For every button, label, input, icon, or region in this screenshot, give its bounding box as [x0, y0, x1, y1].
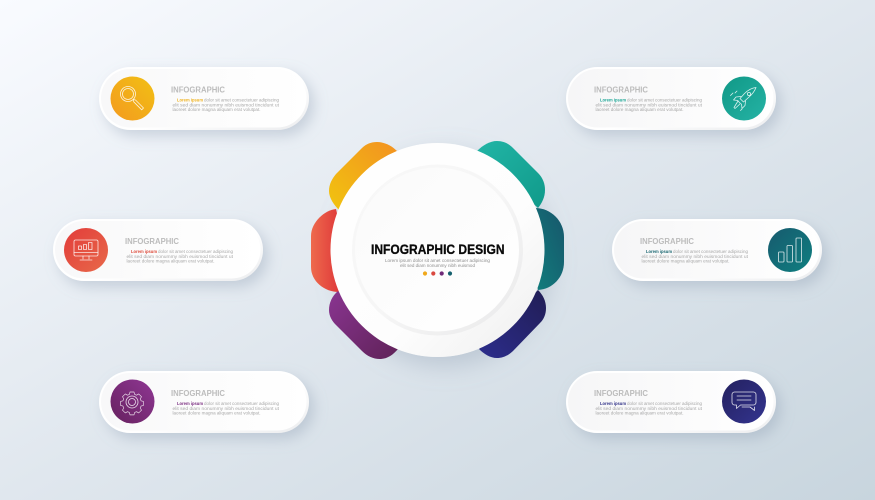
circle shadow: [330, 143, 544, 357]
body text: elit sed diam nonummy nibh euismod tincidunt ut: [642, 254, 749, 259]
body text: [642, 249, 749, 264]
petal: red: [311, 209, 345, 292]
heading: INFOGRAPHIC: [171, 84, 225, 94]
heading: INFOGRAPHIC: [594, 84, 648, 94]
body text: dolor sit amet consectetuer adipiscing: [204, 98, 279, 103]
body text: [172, 98, 280, 112]
center text: Lorem ipsum dolor sit amet consectetuer adipiscing: [385, 258, 490, 264]
outer circle: [330, 143, 544, 357]
petal: yellow: [329, 142, 397, 210]
panel: gear card: [99, 371, 309, 433]
body text: dolor sit amet consectetuer adipiscing: [158, 249, 233, 254]
card body: [99, 371, 309, 433]
body text: Lorem ipsum: [177, 98, 203, 103]
body text: dolor sit amet consectetuer adipiscing: [627, 401, 702, 406]
center text: [385, 258, 490, 269]
panel: search card: [99, 67, 309, 130]
body text: Lorem ipsum: [646, 249, 672, 254]
body text: dolor sit amet consectetuer adipiscing: [673, 249, 748, 254]
icon: magnifier: [110, 76, 154, 120]
body text: [596, 98, 703, 112]
card body: [99, 67, 309, 130]
body text: [126, 249, 234, 264]
panel: rocket card: [566, 67, 776, 130]
icon: bars: [768, 228, 812, 272]
body text: laoreet dolore magna aliquam erat volutpat.: [596, 107, 684, 112]
card body: [566, 67, 776, 130]
center text: elit sed diam nonummy nibh euismod: [400, 263, 475, 269]
body text: dolor sit amet consectetuer adipiscing: [627, 98, 702, 103]
icon: speech bubbles: [722, 380, 766, 424]
icon: rocket: [722, 76, 766, 120]
body text: laoreet dolore magna aliquam erat volutpat.: [126, 259, 214, 264]
center dots: [423, 271, 452, 276]
body text: Lorem ipsum: [600, 401, 626, 406]
card body: [566, 371, 776, 433]
body text: elit sed diam nonummy nibh euismod tincidunt ut: [596, 406, 703, 411]
body text: elit sed diam nonummy nibh euismod tincidunt ut: [596, 102, 703, 107]
body text: [172, 401, 280, 416]
petal: purple: [329, 291, 398, 359]
center title: INFOGRAPHIC DESIGN: [371, 242, 504, 257]
card body: [612, 219, 822, 281]
heading: INFOGRAPHIC: [171, 388, 225, 398]
panel: monitor card: [53, 219, 263, 281]
card body: [53, 219, 263, 281]
heading: INFOGRAPHIC: [640, 236, 694, 246]
petal: teal: [477, 141, 545, 208]
heading: INFOGRAPHIC: [125, 236, 179, 246]
petal: navy: [479, 290, 546, 358]
body text: Lorem ipsum: [177, 401, 203, 406]
body text: laoreet dolore magna aliquam erat volutpat.: [596, 411, 684, 416]
body text: Lorem ipsum: [131, 249, 157, 254]
inner disc: [355, 168, 519, 332]
body text: dolor sit amet consectetuer adipiscing: [204, 401, 279, 406]
body text: laoreet dolore magna aliquam erat volutpat.: [172, 107, 260, 112]
panel: bar chart card: [612, 219, 822, 281]
body text: elit sed diam nonummy nibh euismod tincidunt ut: [126, 254, 234, 259]
petal: dark teal: [530, 208, 564, 290]
body text: laoreet dolore magna aliquam erat volutpat.: [642, 259, 730, 264]
body text: [596, 401, 703, 416]
central diagram: [311, 141, 564, 359]
icon: monitor chart: [64, 228, 108, 272]
inner ring: [352, 164, 523, 336]
icon: gear: [110, 380, 154, 424]
body text: elit sed diam nonummy nibh euismod tincidunt ut: [172, 406, 280, 411]
body text: elit sed diam nonummy nibh euismod tincidunt ut: [172, 102, 280, 107]
body text: Lorem ipsum: [600, 98, 626, 103]
heading: INFOGRAPHIC: [594, 388, 648, 398]
body text: laoreet dolore magna aliquam erat volutpat.: [172, 411, 260, 416]
panel: chat card: [566, 371, 776, 433]
